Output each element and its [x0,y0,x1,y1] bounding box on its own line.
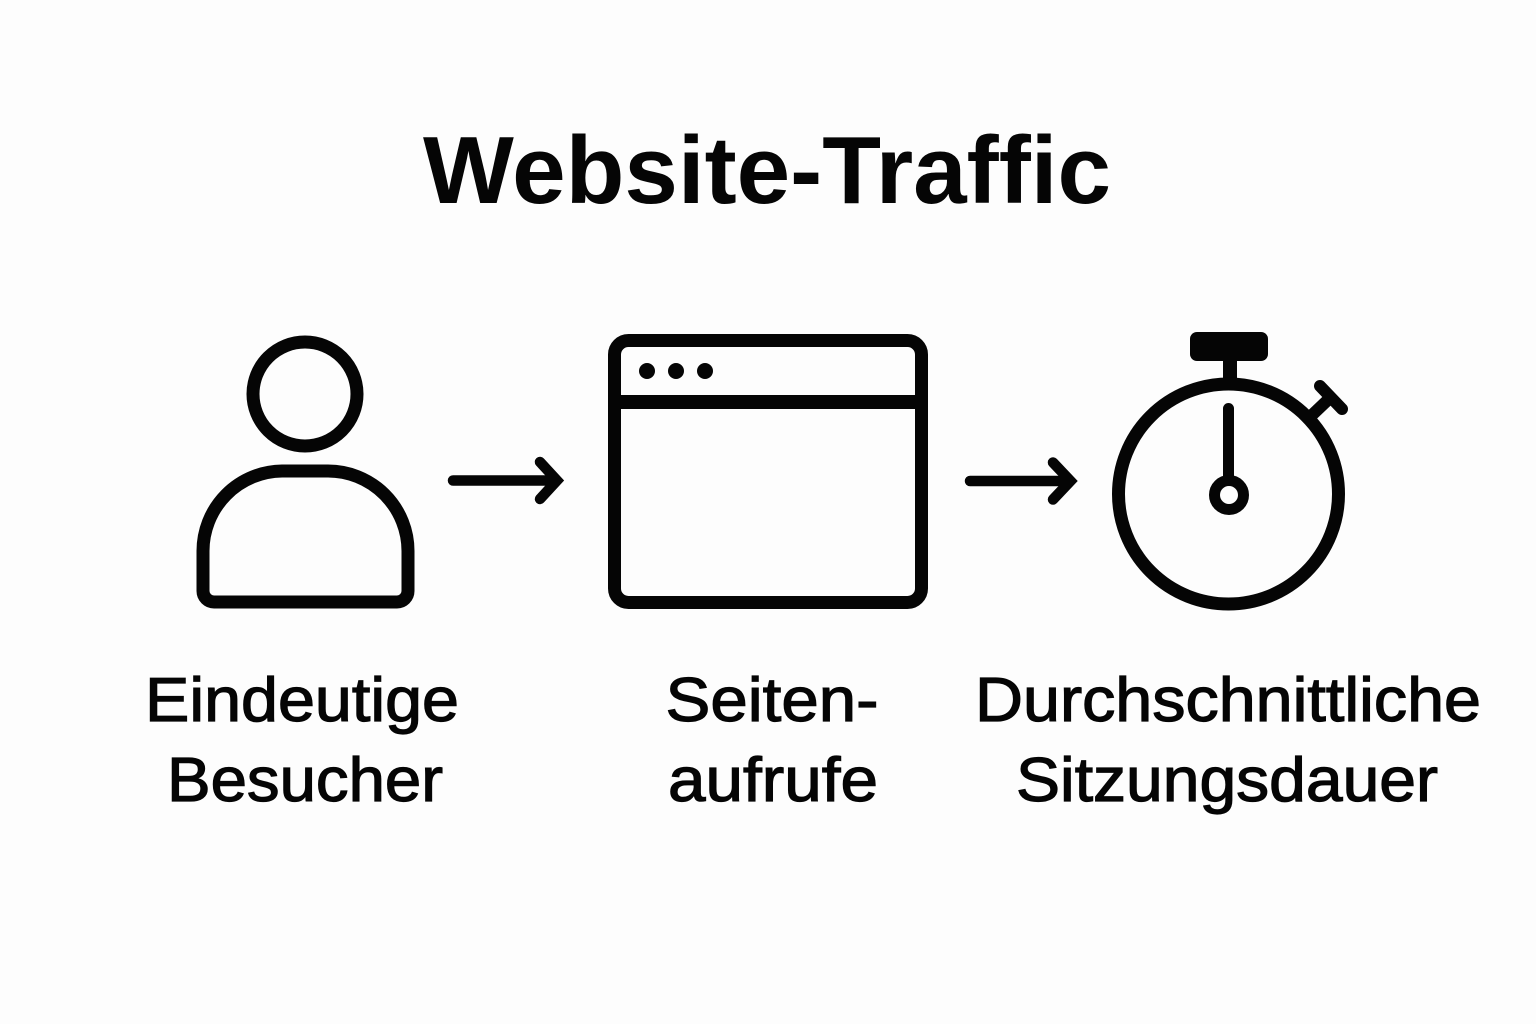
arrow: page views to session duration [970,462,1070,500]
icon: browser window [614,340,922,602]
icon: person [203,342,408,602]
label: page views [666,666,878,815]
arrow: visitors to page views [453,462,557,499]
icon: stopwatch [1118,332,1342,604]
label: average session duration [975,666,1481,815]
title: Website-Traffic [423,117,1111,224]
label: unique visitors [145,666,459,815]
label: page views: aufrufe [668,746,878,815]
label: page views: Seiten- [666,666,878,735]
label: average session duration: Sitzungsdauer [1016,746,1438,815]
label: average session duration: Durchschnittliche [975,666,1481,735]
label: unique visitors: Besucher [167,746,443,815]
label: unique visitors: Eindeutige [145,666,459,735]
